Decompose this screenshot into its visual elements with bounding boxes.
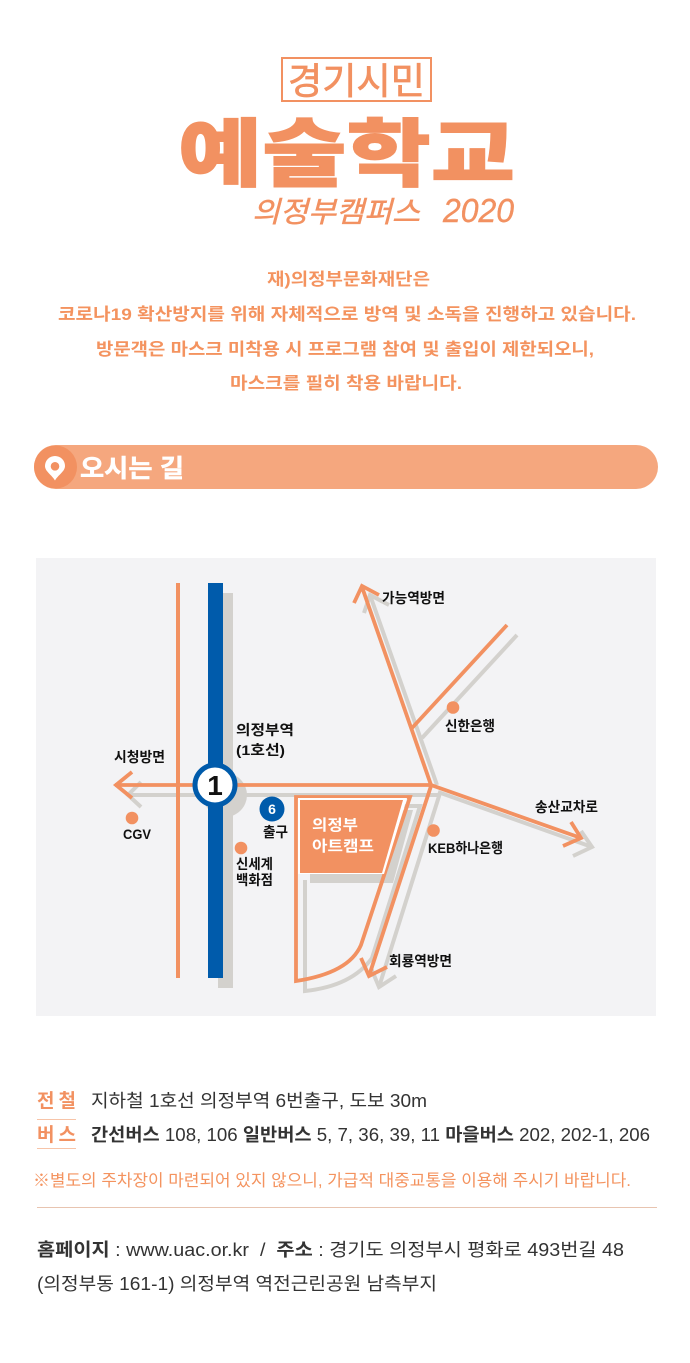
label: station name: (1호선) <box>236 742 285 758</box>
road northeast branch <box>412 625 507 728</box>
art camp building <box>298 798 407 874</box>
orange side road <box>176 583 180 978</box>
label: Songsan direction: 송산교차로 <box>535 799 598 815</box>
label: station name: 의정부역 <box>236 722 294 738</box>
landmark: CGV: CGV <box>123 826 152 842</box>
logo: campus name: 의정부캠퍼스 <box>252 197 420 229</box>
notice text <box>58 270 636 393</box>
road south <box>361 786 431 976</box>
map panel <box>36 558 656 1016</box>
logo: boxed title: 경기시민 <box>288 61 425 102</box>
notice text: 마스크를 필히 착용 바랍니다. <box>230 374 462 393</box>
notice text: 재)의정부문화재단은 <box>267 270 430 289</box>
transit info <box>37 1090 650 1149</box>
label: Ganeung direction: 가능역방면 <box>382 590 445 606</box>
notice text: 방문객은 마스크 미착용 시 프로그램 참여 및 출입이 제한되오니, <box>96 340 594 359</box>
logo: year: 2020 <box>442 192 515 229</box>
station marker 1 <box>195 765 235 805</box>
logo: main title: 예술학교 <box>178 113 515 196</box>
landmark: Shinhan Bank <box>445 701 495 734</box>
contact and address: (의정부동 161-1) 의정부역 역전근린공원 남측부지 <box>37 1274 437 1294</box>
landmark: Shinsegae: 신세계 <box>236 856 273 872</box>
subway label: 전철 <box>37 1090 76 1112</box>
station marker 1: 1 <box>207 770 223 801</box>
route to station <box>115 772 431 798</box>
contact and address: 홈페이지 : www.uac.or.kr / 주소 : 경기도 의정부시 평화로 493번길 48 <box>37 1240 624 1260</box>
subway directions: 지하철 1호선 의정부역 6번출구, 도보 30m <box>91 1091 427 1111</box>
label: city hall direction: 시청방면 <box>114 749 165 765</box>
notice text: 코로나19 확산방지를 위해 자체적으로 방역 및 소독을 진행하고 있습니다. <box>58 305 636 324</box>
road east <box>431 785 581 846</box>
contact and address <box>37 1240 624 1294</box>
landmark: KEB Hana Bank <box>427 824 503 856</box>
heading text: 오시는 길 <box>80 455 184 483</box>
landmark: KEB Hana Bank: KEB하나은행 <box>428 840 503 856</box>
art camp building: 아트캠프 <box>312 838 374 855</box>
road shadows <box>128 593 592 991</box>
logo <box>178 58 515 229</box>
section heading bar <box>34 445 658 489</box>
exit 6 marker: 출구 <box>263 824 288 840</box>
exit 6 marker <box>260 796 288 840</box>
bus routes: 간선버스 108, 106 일반버스 5, 7, 36, 39, 11 마을버스 202, 202-1, 206 <box>91 1125 650 1145</box>
landmark: Shinsegae: 백화점 <box>236 872 273 888</box>
landmark: CGV <box>123 812 152 842</box>
icon: location pin <box>45 456 65 480</box>
art camp block outline <box>296 797 410 981</box>
subway line 1 <box>208 583 223 978</box>
bus label: 버스 <box>37 1124 76 1146</box>
art camp building: 의정부 <box>312 817 358 834</box>
exit 6 marker: 6 <box>268 801 276 817</box>
label: station name <box>236 722 294 758</box>
road north <box>354 586 431 785</box>
landmark: Shinhan Bank: 신한은행 <box>445 718 495 734</box>
landmark: Shinsegae <box>235 842 273 888</box>
label: Hoeryong direction: 회룡역방면 <box>389 953 452 969</box>
parking note: ※별도의 주차장이 마련되어 있지 않으니, 가급적 대중교통을 이용해 주시기 바랍니다. <box>33 1171 631 1190</box>
